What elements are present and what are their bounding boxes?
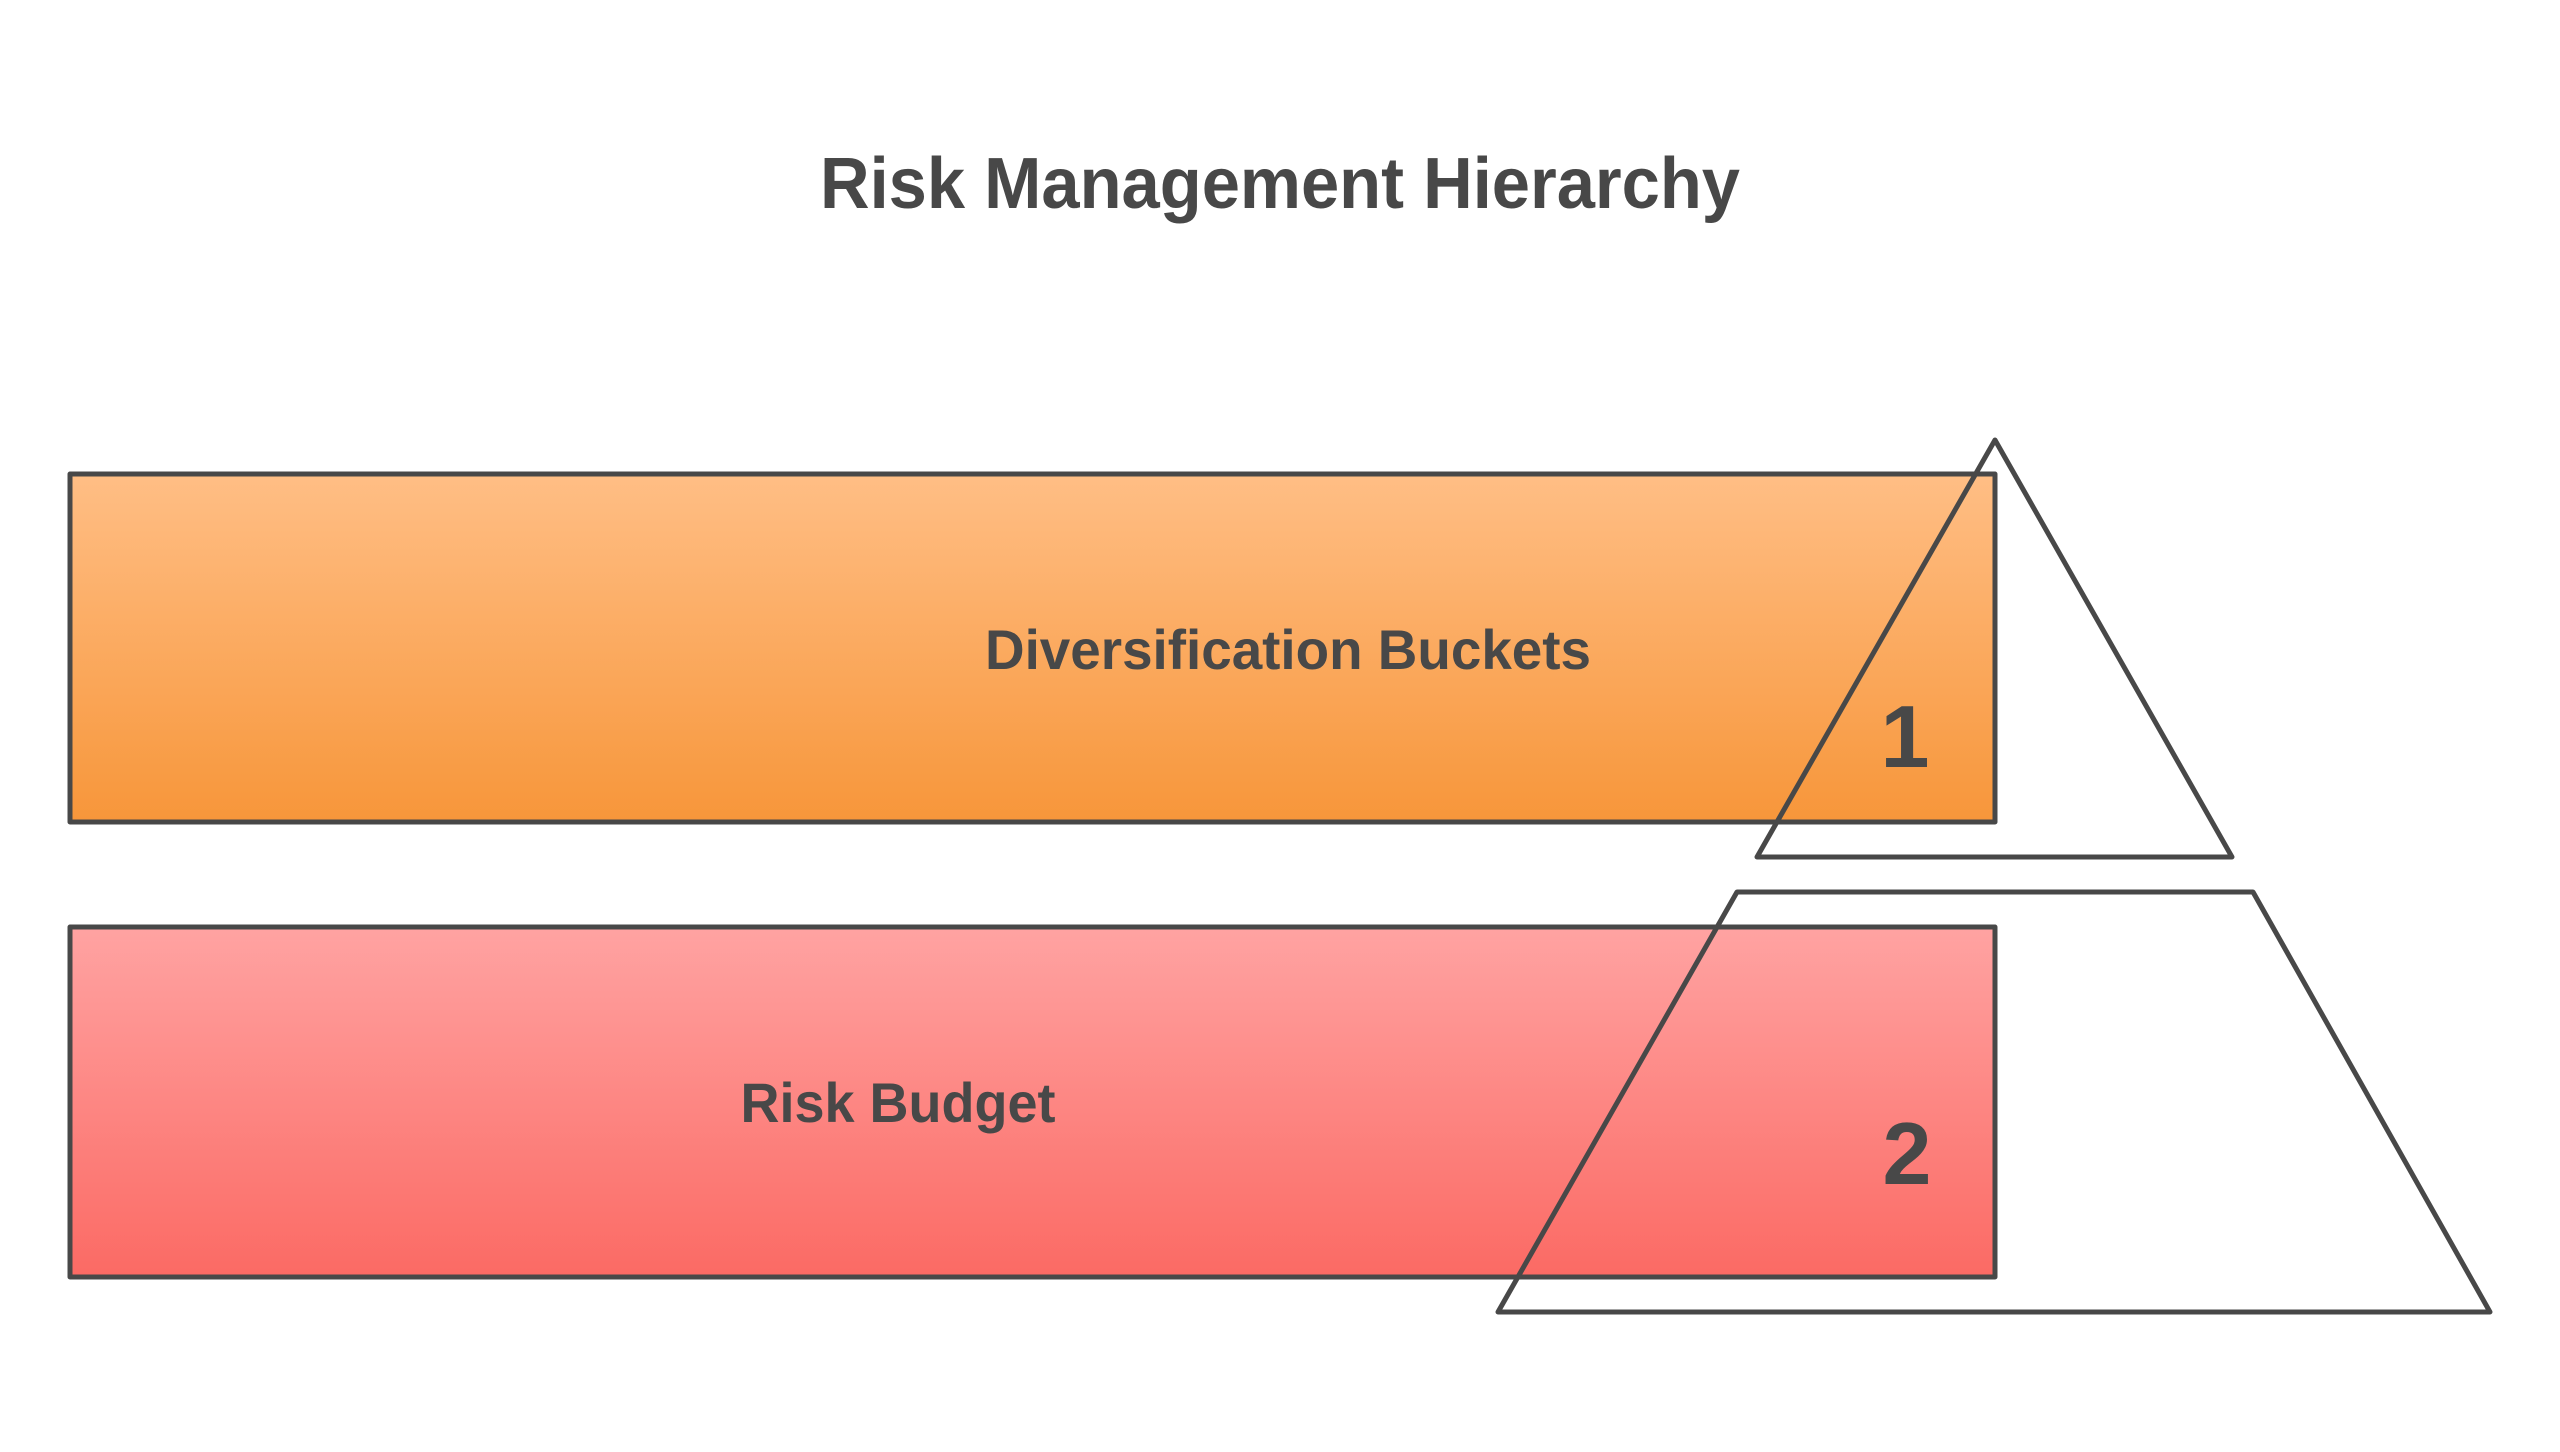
pyramid tier 1	[1757, 440, 2232, 857]
title: Risk Management Hierarchy	[820, 144, 1740, 224]
label: risk budget: Risk Budget	[740, 1071, 1056, 1134]
panel: diversification buckets	[70, 474, 1995, 822]
label: diversification buckets: Diversification Buckets	[985, 618, 1591, 681]
number 2: 2	[1883, 1104, 1931, 1203]
number 1: 1	[1881, 687, 1929, 786]
pyramid tier 2	[1498, 892, 2490, 1312]
panel: risk budget	[70, 927, 1995, 1277]
